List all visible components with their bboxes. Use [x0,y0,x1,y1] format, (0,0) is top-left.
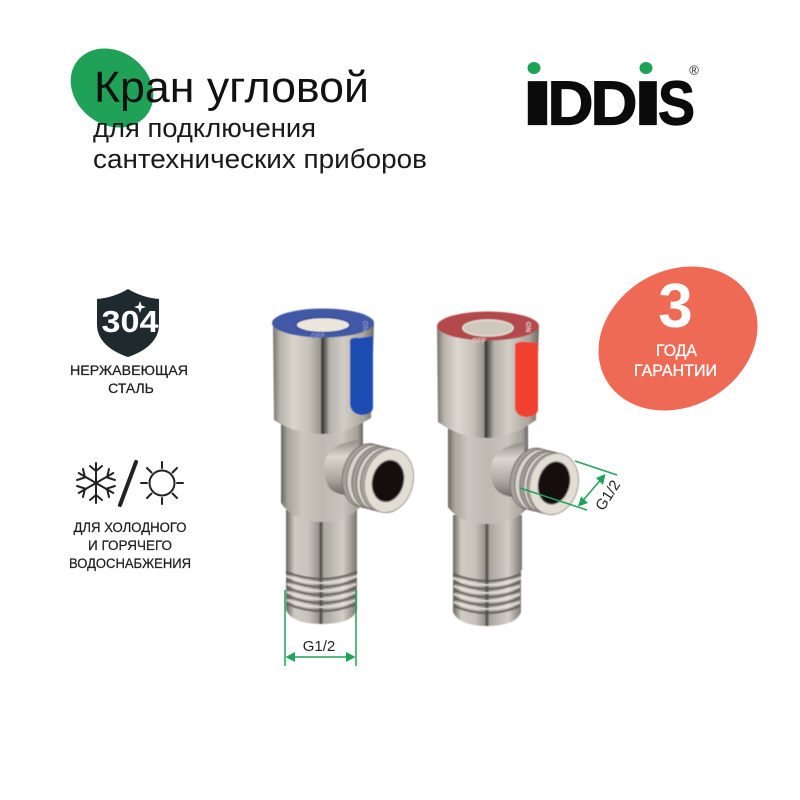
green accent blob [55,32,169,144]
warranty badge: 3 [658,272,693,341]
brand logo IDDIS: ® [689,62,699,78]
caption: cold and hot water supply: ДЛЯ ХОЛОДНОГО [74,520,186,535]
warranty badge: ГОДА [656,342,697,360]
brand logo IDDIS: S [658,69,695,138]
blue top plate [272,308,374,338]
centre insert [296,318,350,332]
icon: slash [120,462,136,505]
warranty badge: ГАРАНТИИ [634,362,717,380]
icon: snowflake [77,463,115,503]
threaded end [286,568,357,624]
side outlet stub [491,442,524,498]
handle cap [273,323,374,434]
material badge: stainless steel 304 [70,289,188,396]
centre insert [463,320,513,336]
material badge: stainless steel 304: 304 [102,304,159,339]
brand logo IDDIS: D [590,69,638,138]
caption: cold and hot water supply [69,520,191,571]
top markings [472,322,531,345]
side outlet stub [324,440,358,495]
brand logo IDDIS: I [521,69,554,138]
subtitle: сантехнических приборов [93,144,427,174]
top markings [311,321,368,340]
top markings: ON [361,321,368,331]
valve body [448,425,528,524]
dimension: side outlet G1/2: G1/2 [592,477,624,514]
title: Кран угловой [94,63,369,112]
caption: cold and hot water supply: И ГОРЯЧЕГО [88,538,172,553]
red top plate [437,312,539,340]
side outlet thread [336,439,420,518]
dimension: side outlet G1/2 [520,461,624,514]
blue lever [350,336,373,415]
brand logo IDDIS [521,62,699,138]
icon: cold and hot water [77,462,183,505]
valve: blue cold-water handle [272,308,420,624]
subtitle [93,113,427,174]
dimension: bottom thread G1/2: G1/2 [303,638,335,655]
side outlet bore [368,457,408,505]
warranty badge [572,238,784,439]
material badge: stainless steel 304: СТАЛЬ [108,380,154,396]
side outlet thread [504,443,585,520]
brand logo IDDIS: D [548,69,594,138]
handle cap [437,326,539,438]
red lever [515,342,538,417]
top markings: OFF [472,338,487,345]
lower shank [453,515,522,577]
side outlet bore [534,458,574,508]
valve body [281,420,363,522]
caption: cold and hot water supply: ВОДОСНАБЖЕНИЯ [69,556,191,571]
subtitle: для подключения [93,113,316,143]
icon: sun [141,462,183,504]
material badge: stainless steel 304: НЕРЖАВЕЮЩАЯ [70,362,188,378]
brand logo IDDIS: I [633,69,663,138]
lower shank [286,510,357,575]
dimension: bottom thread G1/2 [285,590,356,666]
top markings: ON [524,322,531,332]
valve: red hot-water handle [437,312,585,626]
threaded end [453,570,521,626]
top markings: OFF [311,333,326,340]
